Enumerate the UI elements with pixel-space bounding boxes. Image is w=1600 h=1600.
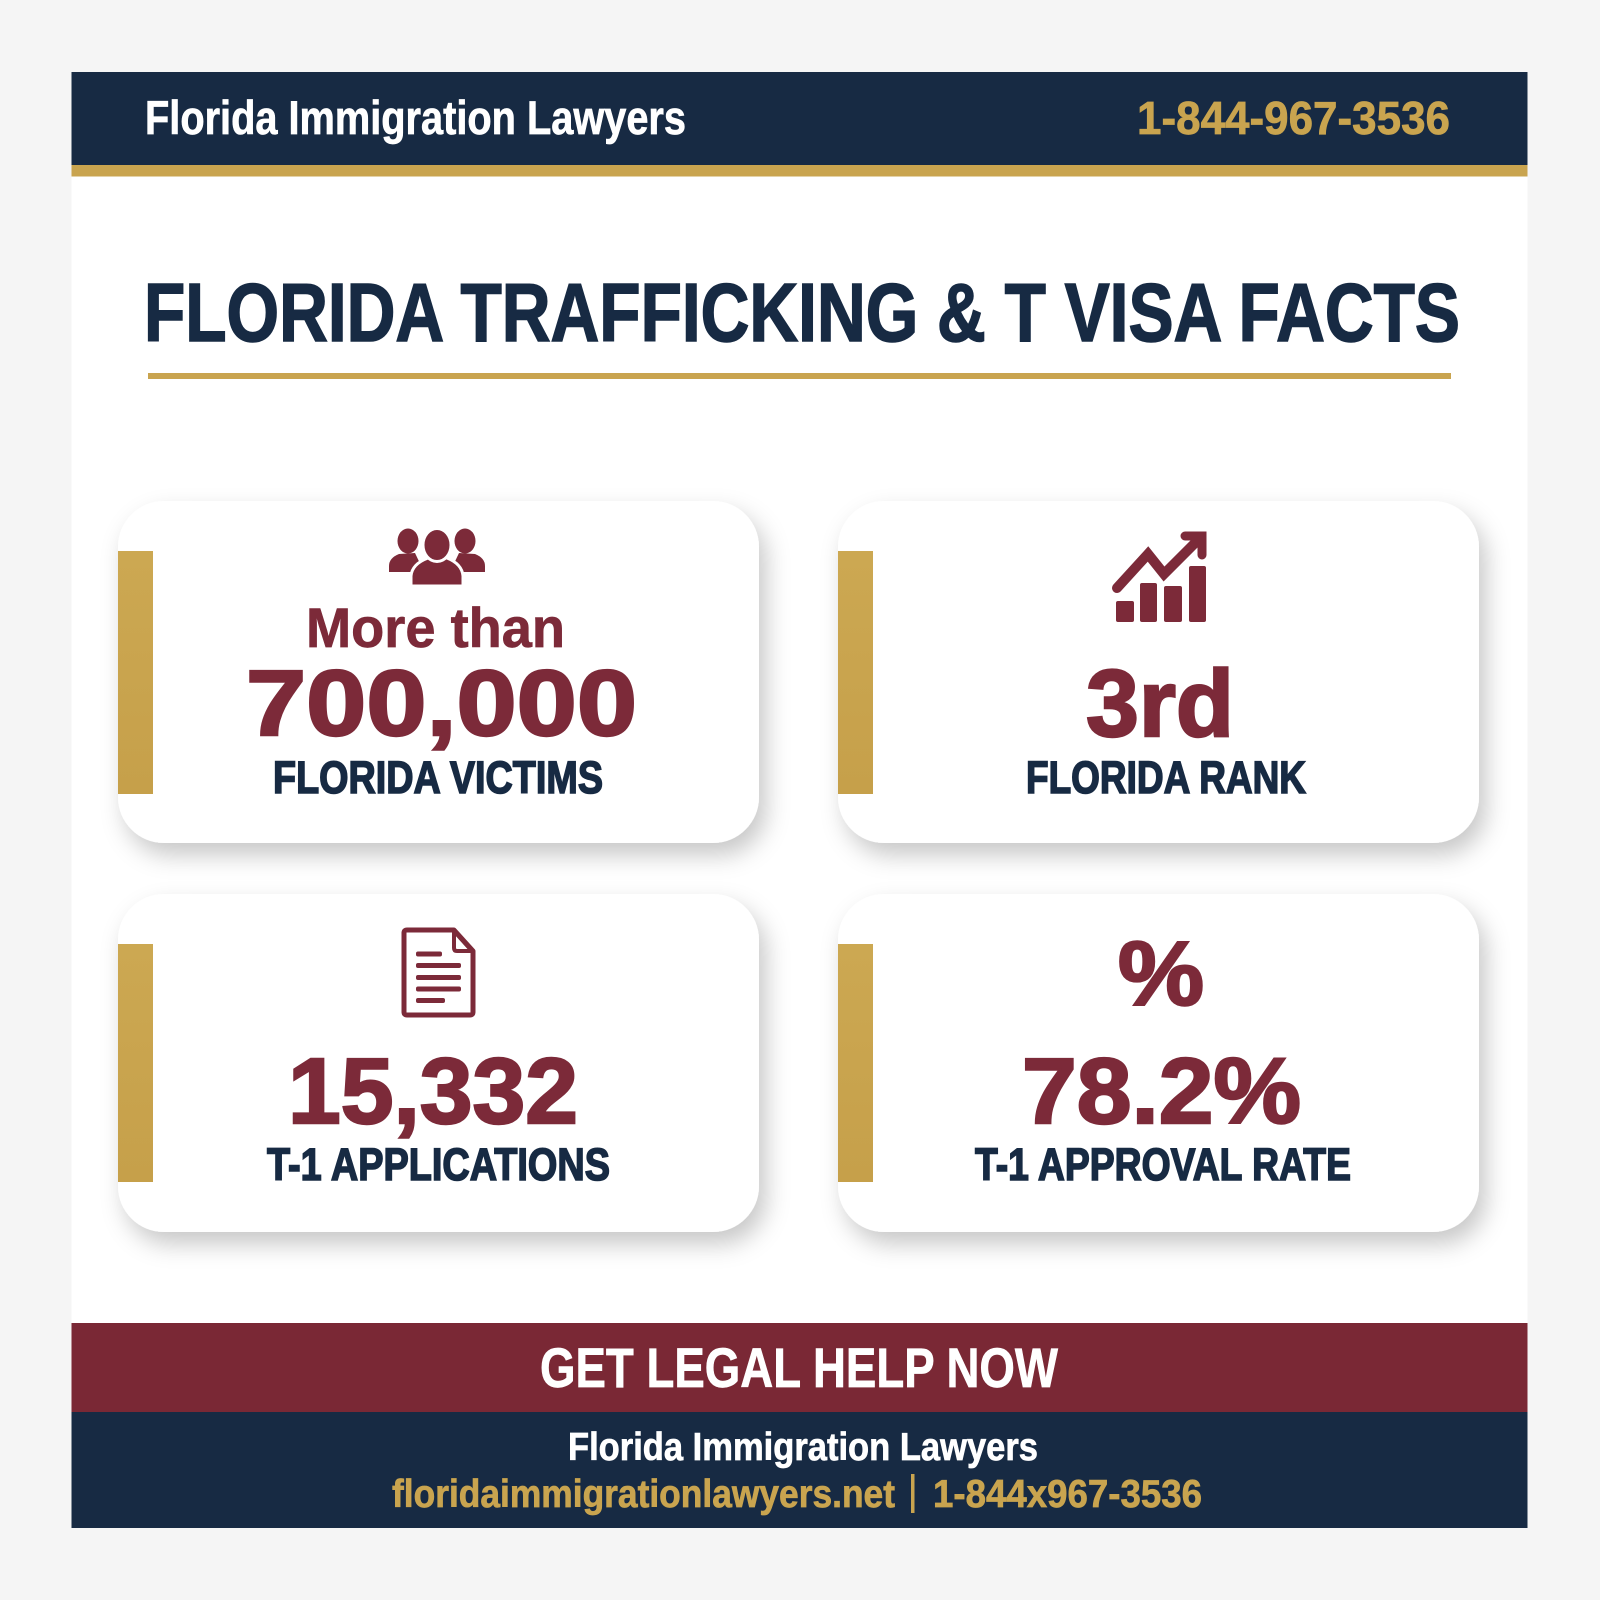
panel: Florida victims	[118, 501, 759, 843]
panel: T-1 applications	[118, 894, 759, 1232]
header bar	[72, 72, 1528, 176]
call to action banner	[72, 1323, 1528, 1412]
footer phone number: 1-844x967-3536	[933, 1473, 1202, 1516]
icon: document	[404, 930, 473, 1015]
footer firm name: Florida Immigration Lawyers	[568, 1426, 1038, 1469]
panel: T-1 approval rate	[838, 894, 1479, 1232]
stat: 3rd: 3rd	[1086, 651, 1234, 757]
header firm name: Florida Immigration Lawyers	[145, 91, 686, 144]
stat: more than: More than	[306, 596, 565, 659]
panel: Florida rank	[838, 501, 1479, 843]
icon: rising chart	[1116, 536, 1206, 622]
call to action banner: GET LEGAL HELP NOW	[540, 1336, 1058, 1399]
stat: 15,332: 15,332	[288, 1039, 578, 1143]
footer website: floridaimmigrationlawyers.net	[392, 1473, 895, 1516]
footer separator	[911, 1474, 914, 1513]
label: T-1 approval rate: T-1 APPROVAL RATE	[975, 1139, 1351, 1190]
label: Florida victims: FLORIDA VICTIMS	[273, 752, 603, 803]
label: Florida rank: FLORIDA RANK	[1026, 752, 1306, 803]
icon: percent sign: %	[1118, 924, 1204, 1025]
label: T-1 applications: T-1 APPLICATIONS	[267, 1139, 610, 1190]
stat: 700,000: 700,000	[246, 651, 637, 755]
icon: people	[389, 528, 485, 586]
stat: 78.2%: 78.2%	[1022, 1039, 1301, 1143]
header phone number: 1-844-967-3536	[1137, 92, 1450, 144]
footer contact bar	[72, 1412, 1528, 1528]
